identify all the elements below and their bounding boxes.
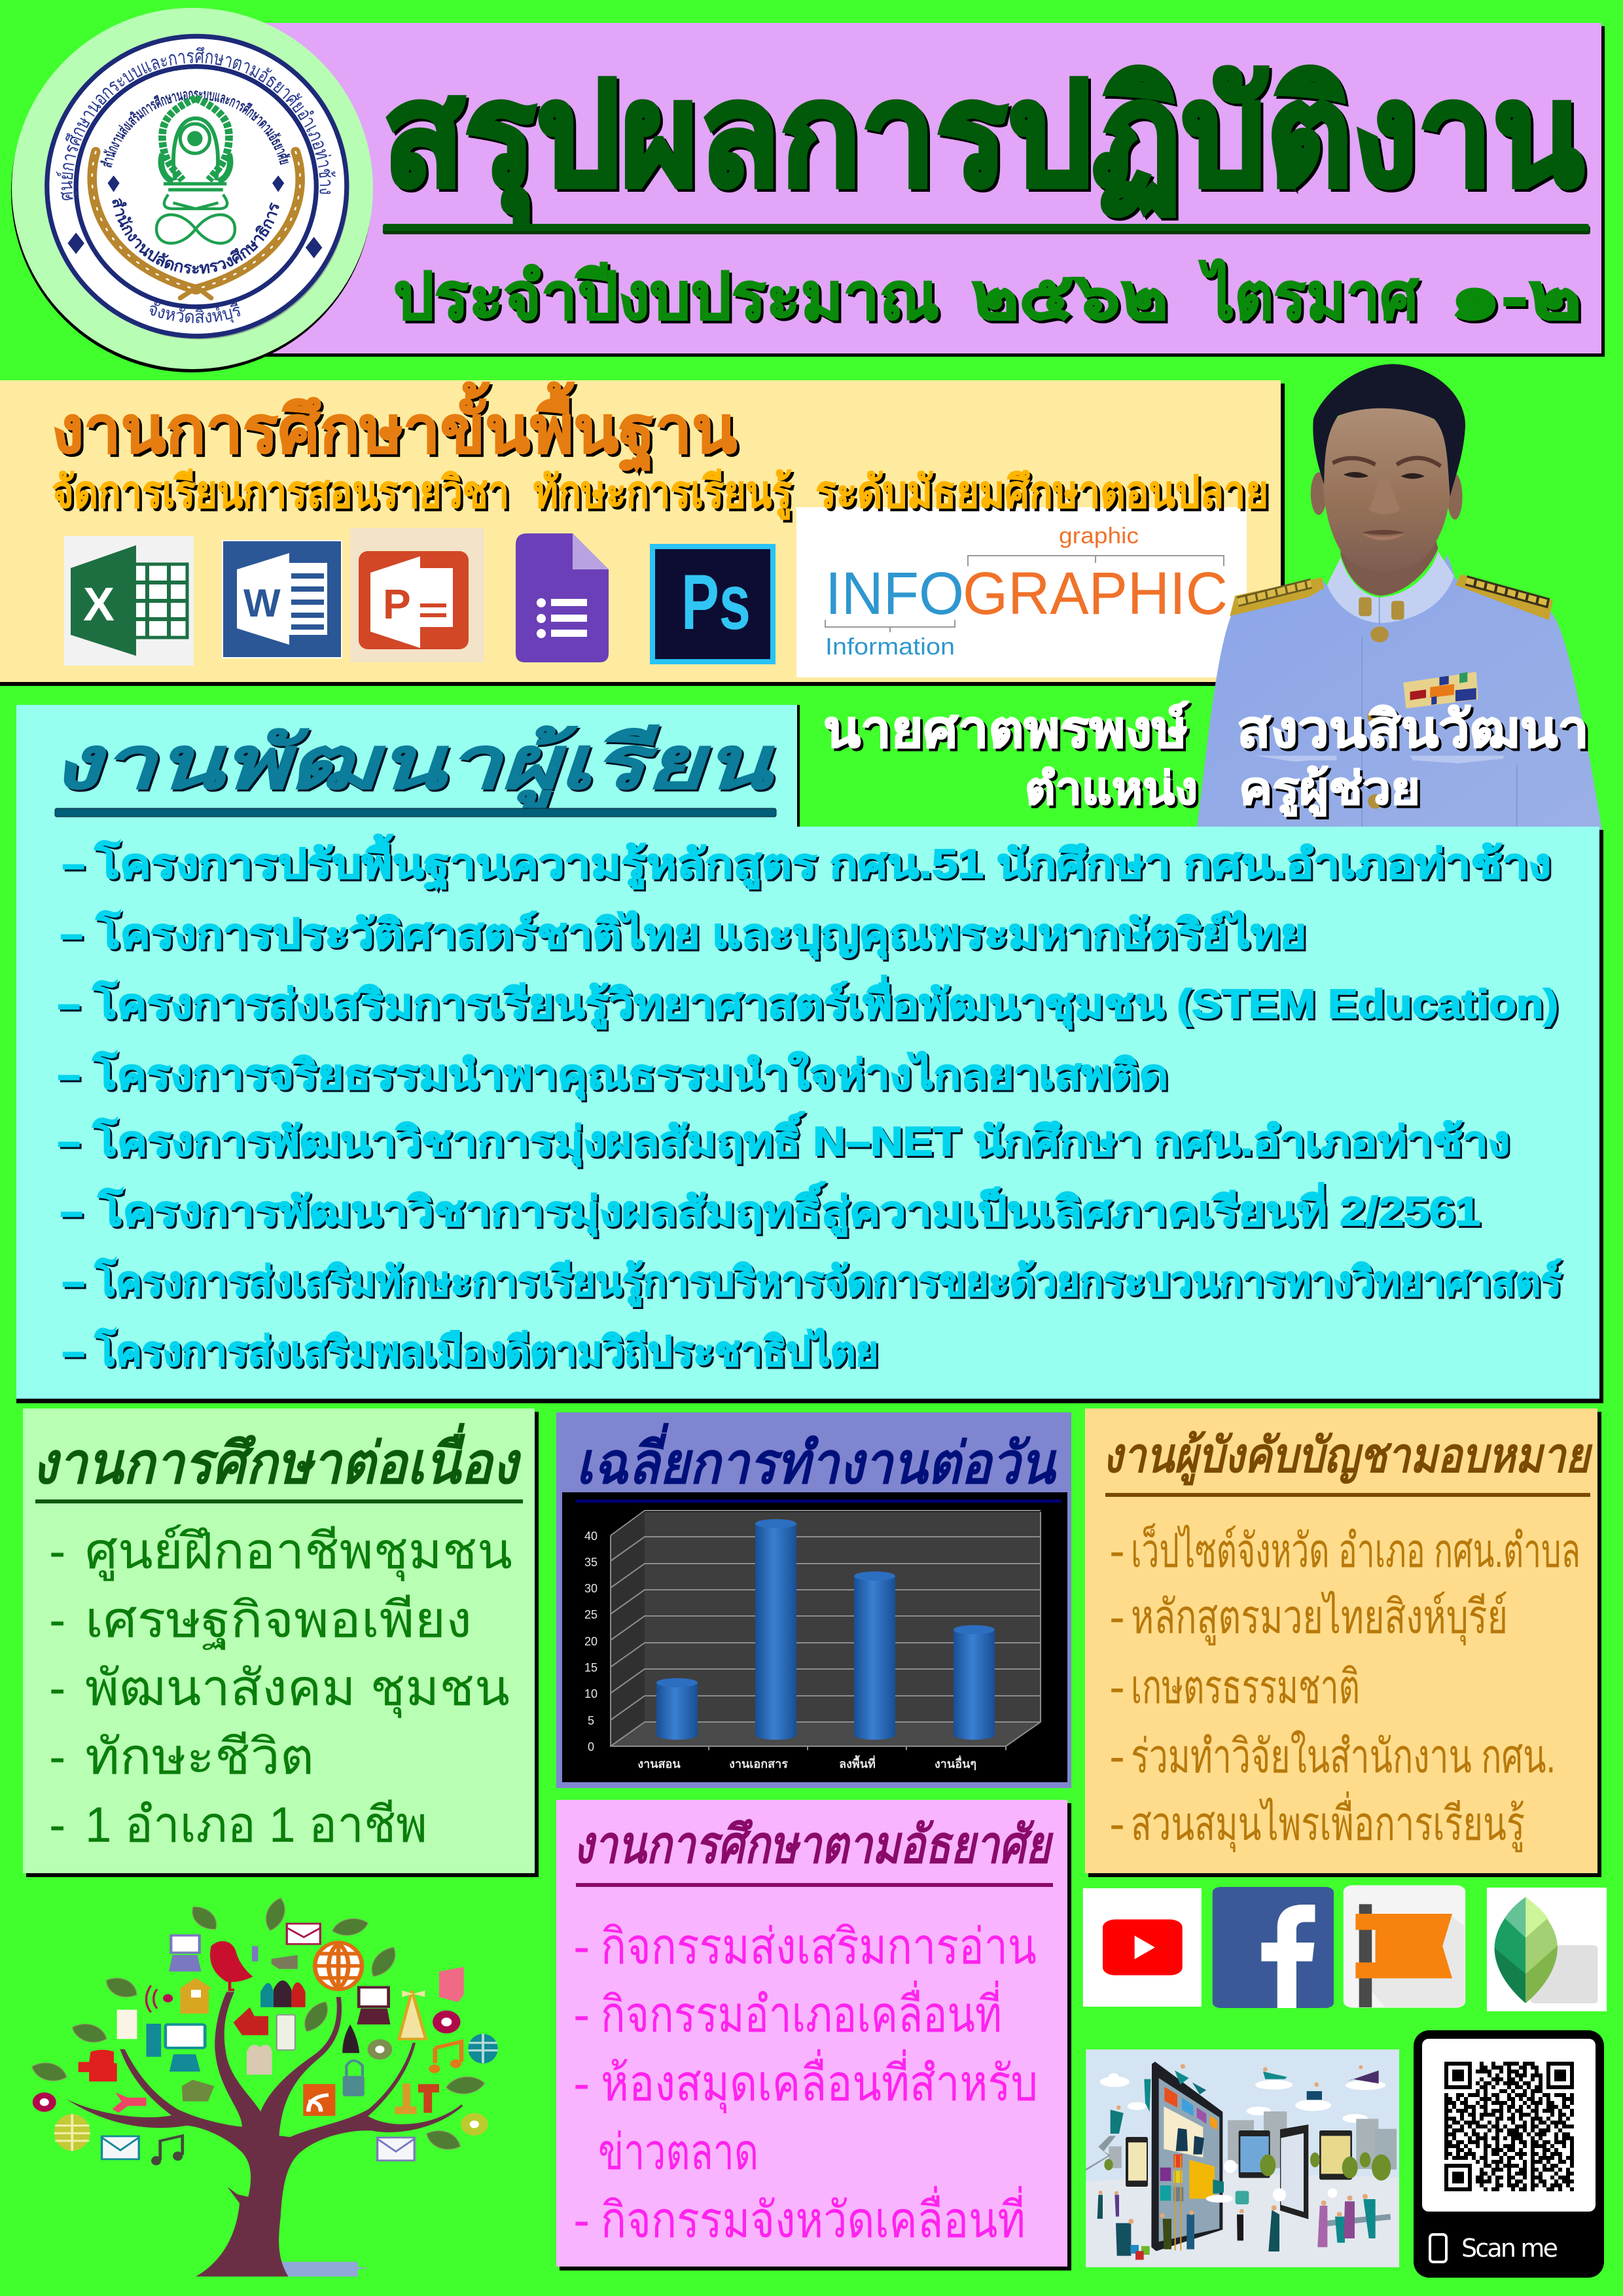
header banner: [209, 23, 1605, 357]
laptops and computers: [147, 1935, 390, 2072]
heading: งานการศึกษาขั้นพื้นฐาน: [52, 382, 737, 473]
bar chart: 20: [584, 1635, 597, 1648]
project list: –: [62, 1329, 84, 1374]
flowers: [67, 175, 322, 259]
bar chart: 5: [588, 1714, 594, 1727]
icon: snapseed: [1487, 1888, 1607, 2011]
bar chart: 15: [584, 1661, 597, 1674]
leaves: [28, 1896, 486, 2154]
list: หลักสูตรมวยไทยสิงห์บุรีย์: [1131, 1590, 1508, 1645]
list: เกษตรธรรมชาติ: [1131, 1661, 1360, 1713]
icon: word: [223, 541, 342, 658]
project list: –: [58, 1119, 80, 1164]
project list: โครงการประวัติศาสตร์ชาติไทย และบุญคุณพระมหากษัตริย์ไทย: [96, 910, 1306, 959]
subheading: [52, 467, 1268, 520]
QR code panel: [1414, 2030, 1604, 2278]
project list: โครงการพัฒนาวิชาการมุ่งผลสัมฤทธิ์ N–NET นักศึกษา กศน.อำเภอท่าช้าง: [92, 1111, 1510, 1166]
wreath: [92, 152, 300, 298]
neck and face: [1340, 524, 1438, 596]
teacher name: นายศาตพรพงษ์: [823, 700, 1189, 758]
project list: โครงการพัฒนาวิชาการมุ่งผลสัมฤทธิ์สู่ความเป็นเลิศภาคเรียนที่ 2/2561: [98, 1181, 1480, 1236]
project list: โครงการปรับพื้นฐานความรู้หลักสูตร กศน.51 นักศึกษา กศน.อำเภอท่าช้าง: [94, 834, 1551, 890]
trunk and branches: [66, 1992, 463, 2276]
bars: [656, 1519, 995, 1740]
list: พัฒนาสังคม ชุมชน: [85, 1660, 510, 1718]
project list: โครงการจริยธรรมนำพาคุณธรรมนำใจห่างไกลยาเสพติด: [92, 1050, 1168, 1100]
teacher name: [823, 700, 1589, 817]
bar chart: [584, 1511, 1041, 1770]
list: -: [573, 2193, 590, 2248]
heading: งานการศึกษาต่อเนื่อง: [32, 1423, 522, 1496]
people: [1086, 2064, 1391, 2260]
panel: continuing education: [23, 1408, 539, 1877]
subheading: จัดการเรียนการสอนรายวิชา: [52, 467, 509, 517]
list: -: [49, 1797, 65, 1853]
bar chart: 35: [584, 1556, 597, 1569]
category labels: ลงพื้นที่: [839, 1755, 876, 1770]
list: กิจกรรมจังหวัดเคลื่อนที่: [601, 2186, 1026, 2248]
panel: learner development: [16, 705, 1603, 1403]
QR code: [1444, 2062, 1574, 2191]
outer ring text: ศูนย์การศึกษานอกระบบและการศึกษาตามอัธยาศัยอำเภอท่าช้าง: [56, 47, 336, 200]
list: -: [573, 2056, 590, 2111]
bird: [210, 1941, 253, 1982]
logo badge: [11, 8, 373, 372]
icon: word: W: [243, 581, 281, 625]
list: -: [49, 1524, 65, 1579]
subtitle: ๒๕๖๒: [971, 260, 1168, 333]
trees: [1104, 2152, 1391, 2181]
icon: photoshop: Ps: [681, 558, 751, 646]
list: -: [49, 1592, 65, 1648]
uniform: [1196, 554, 1602, 831]
project list: –: [58, 1052, 80, 1098]
project list: –: [62, 842, 84, 887]
project list: –: [60, 1189, 82, 1234]
subtitle: ประจำปีงบประมาณ: [393, 260, 939, 333]
heading: งานพัฒนาผู้เรียน: [52, 722, 775, 808]
panel: basic education: [0, 380, 1285, 686]
category labels: งานอื่นๆ: [935, 1755, 976, 1770]
inner ring text: สำนักงานส่งเสริมการศึกษานอกระบบและการศึกษาตามอัธยาศัย: [100, 90, 291, 168]
subheading: ระดับมัธยมศึกษาตอนปลาย: [815, 467, 1268, 517]
list: กิจกรรมส่งเสริมการอ่าน: [601, 1919, 1037, 1975]
social icons: [1083, 1885, 1607, 2011]
category labels: งานเอกสาร: [729, 1757, 788, 1770]
infographic logo: INFO: [825, 560, 964, 627]
list: -: [49, 1729, 65, 1785]
bar chart: 30: [584, 1582, 597, 1595]
lower ring text: สำนักงานปลัดกระทรวงศึกษาธิการ: [113, 198, 279, 274]
panel: informal education: [556, 1800, 1071, 2270]
eyes, nose and mouth: [1332, 458, 1440, 466]
list: [573, 1919, 1038, 2248]
hair: [1313, 364, 1465, 497]
scan me label: Scan me: [1461, 2234, 1558, 2263]
list: -: [573, 1919, 590, 1975]
icon: flag: [1344, 1885, 1465, 2008]
infographic logo: graphic: [1059, 524, 1139, 548]
teacher name: ตำแหน่ง: [1025, 764, 1198, 814]
category labels: [637, 1755, 976, 1770]
list: เศรษฐกิจพอเพียง: [85, 1592, 472, 1650]
subtitle: [393, 259, 1582, 333]
project list: –: [60, 912, 82, 957]
icon: powerpoint: P: [383, 581, 411, 628]
list: -: [1109, 1591, 1125, 1643]
category labels: งานสอน: [637, 1757, 681, 1770]
icon: excel: [64, 536, 194, 666]
buildings: [1109, 2111, 1378, 2169]
small tablets: [1126, 2125, 1352, 2219]
bar chart: 40: [584, 1530, 597, 1543]
bar chart: 10: [584, 1687, 597, 1700]
list: [1109, 1523, 1580, 1852]
icon: powerpoint: [350, 528, 484, 662]
icon: youtube: [1083, 1888, 1202, 2007]
list: -: [573, 1987, 590, 2043]
list: ทักษะชีวิต: [85, 1729, 314, 1785]
project list: [58, 834, 1561, 1374]
subtitle: ๑-๒: [1450, 260, 1582, 333]
list: -: [1109, 1661, 1125, 1713]
emblem: [156, 98, 235, 243]
teacher name: สงวนสินวัฒนา: [1237, 700, 1589, 758]
infographic logo: GRAPHIC: [963, 560, 1228, 627]
bar chart: 25: [584, 1608, 597, 1621]
infographic logo: Information: [825, 633, 955, 660]
icon: google forms: [516, 533, 609, 662]
photo: teacher portrait: [1196, 364, 1602, 831]
illustration: digital city: [1086, 2049, 1399, 2267]
globe icons: [54, 1943, 498, 2151]
project list: โครงการส่งเสริมพลเมืองดีตามวิถีประชาธิปไตย: [94, 1327, 878, 1374]
list: -: [1109, 1525, 1125, 1577]
subheading: ทักษะการเรียนรู้: [533, 467, 792, 520]
heading: เฉลี่ยการทำงานต่อวัน: [576, 1423, 1057, 1496]
heading: งานการศึกษาตามอัธยาศัย: [573, 1816, 1054, 1874]
teacher name: ครูผู้ช่วย: [1239, 764, 1420, 817]
project list: –: [58, 982, 80, 1027]
icon: excel: X: [83, 579, 115, 631]
list: ห้องสมุดเคลื่อนที่สำหรับ: [601, 2049, 1038, 2113]
icon: photoshop: [652, 547, 773, 662]
epaulettes: [1230, 577, 1324, 616]
panel: average work per day: [556, 1412, 1071, 1788]
list: [49, 1524, 512, 1853]
list: กิจกรรมอำเภอเคลื่อนที่: [601, 1981, 1002, 2043]
bar chart: 0: [588, 1740, 594, 1753]
list: ศูนย์ฝึกอาชีพชุมชน: [85, 1524, 512, 1581]
list: -: [1109, 1798, 1125, 1850]
medal ribbons: [1403, 672, 1478, 708]
icon: phone: [1430, 2234, 1446, 2262]
collar pins and buttons: [1359, 597, 1404, 809]
project list: –: [62, 1259, 84, 1304]
big tablet: [1151, 2062, 1222, 2251]
list: ข่าวตลาด: [598, 2125, 758, 2180]
infographic logo: [796, 507, 1247, 677]
list: -: [1109, 1731, 1125, 1783]
project list: โครงการส่งเสริมการเรียนรู้วิทยาศาสตร์เพื่อพัฒนาชุมชน (STEM Education): [92, 975, 1558, 1029]
clouds: [1100, 2073, 1385, 2123]
small icons: [33, 1924, 488, 2165]
project list: โครงการส่งเสริมทักษะการเรียนรู้การบริหารจัดการขยะด้วยกระบวนการทางวิทยาศาสตร์: [94, 1257, 1561, 1306]
subtitle: ไตรมาศ: [1199, 259, 1419, 333]
panel: assigned work: [1085, 1408, 1601, 1877]
list: -: [49, 1660, 65, 1716]
province text: จังหวัดสิงห์บุรี: [150, 301, 241, 323]
icon: facebook: [1213, 1887, 1334, 2008]
illustration: technology tree: [28, 1896, 498, 2276]
list: 1 อำเภอ 1 อาชีพ: [85, 1797, 427, 1853]
